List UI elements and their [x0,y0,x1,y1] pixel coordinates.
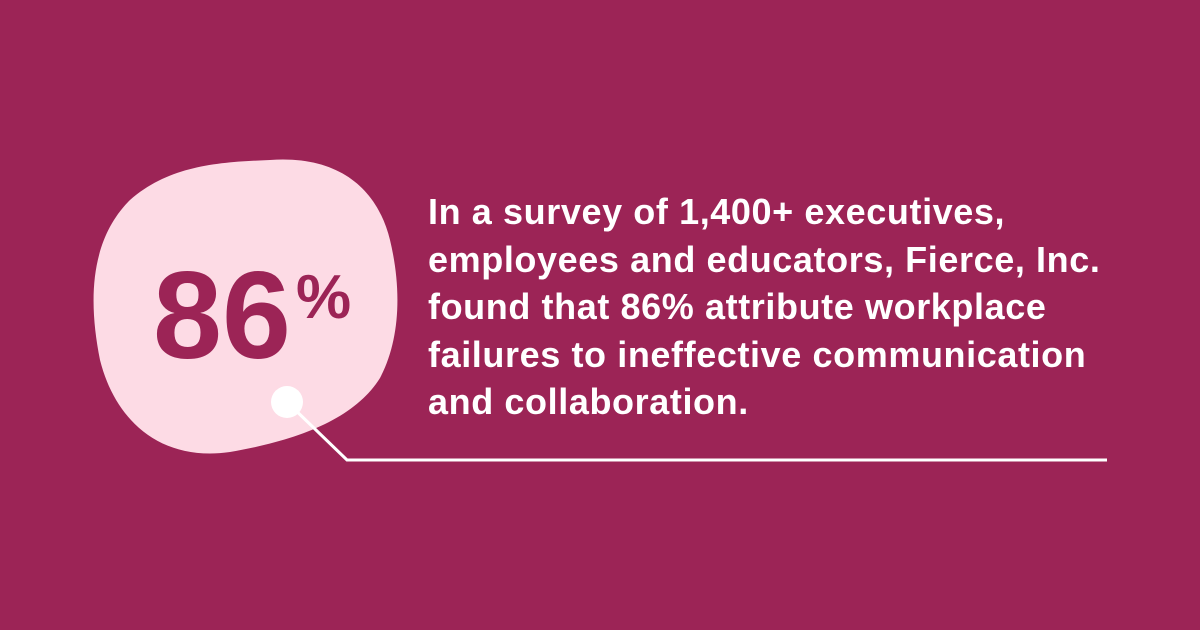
text block: survey finding: employees and educators, Fierce, Inc. [428,238,1100,280]
stat: 86%: 86 [153,247,291,385]
stat: 86%: % [296,263,351,332]
connector line with dot [271,386,1107,460]
text block: survey finding: and collaboration. [428,381,749,422]
text block: survey finding: failures to ineffective communication [428,334,1086,374]
text block: survey finding: found that 86% attribute workplace [428,286,1046,327]
stat: 86% [153,247,351,385]
text block: survey finding [428,191,1100,422]
blob [94,160,397,453]
text block: survey finding: In a survey of 1,400+ executives, [428,191,1005,232]
